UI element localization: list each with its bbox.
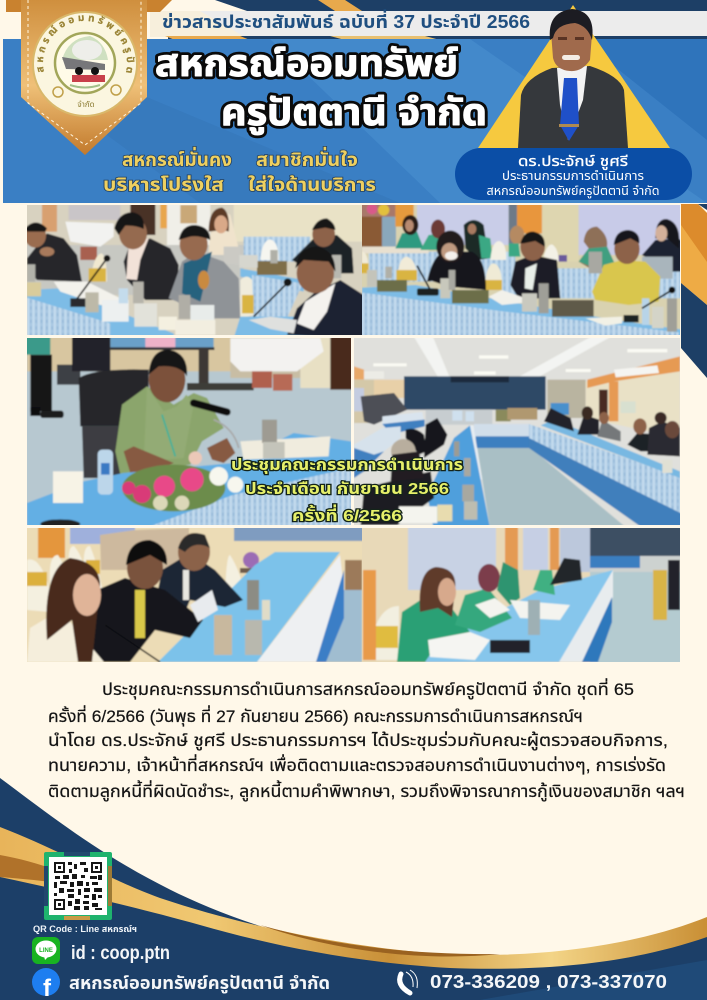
- edition line: ข่าวสารประชาสัมพันธ์ ฉบับที่ 37 ประจำปี 2566: [162, 9, 530, 32]
- slogan: สมาชิกมั่นใจ: [256, 147, 358, 171]
- body text: ติดตามลูกหนี้ที่ผิดนัดชำระ, ลูกหนี้ตามคำพิพากษา, รวมถึงพิจารณาการกู้เงินของสมาชิก ฯลฯ: [48, 780, 685, 801]
- icon: phone: [400, 970, 417, 993]
- title: ครูปัตตานี จำกัด: [221, 92, 487, 135]
- title: ครูปัตตานี จำกัด: [221, 92, 487, 135]
- photo caption: ครั้งที่ 6/2566: [292, 504, 402, 525]
- body text: [48, 678, 685, 801]
- photo: wide room: [354, 338, 680, 525]
- body text: ประชุมคณะกรรมการดำเนินการสหกรณ์ออมทรัพย์ครูปัตตานี จำกัด ชุดที่ 65: [102, 678, 634, 699]
- Facebook name: สหกรณ์ออมทรัพย์ครูปัตตานี จำกัด: [69, 973, 330, 994]
- portrait: [518, 9, 628, 148]
- slogan: ใส่ใจด้านบริการ: [248, 174, 376, 196]
- footer swoosh: [0, 778, 707, 1000]
- yellow triangle: [478, 5, 670, 148]
- photo caption: ประจำเดือน กันยายน 2566: [245, 481, 449, 498]
- side decoration: [681, 204, 707, 378]
- gold ribbon with seal: [6, 0, 172, 155]
- blue panel: [3, 39, 707, 203]
- slogan: สหกรณ์มั่นคง: [122, 147, 232, 171]
- QR code: [44, 852, 112, 920]
- name pill: ประธานกรรมการดำเนินการ: [502, 169, 644, 183]
- icon: LINE: [32, 937, 60, 964]
- body text: นำโดย ดร.ประจักษ์ ชูศรี ประธานกรรมการฯ ได้ประชุมร่วมกับคณะผู้ตรวจสอบกิจการ,: [48, 732, 668, 750]
- body text: ทนายความ, เจ้าหน้าที่สหกรณ์ฯ เพื่อติดตามและตรวจสอบการดำเนินงานต่างๆ, การเร่งรัด: [48, 754, 666, 775]
- photo caption: ประชุมคณะกรรมการดำเนินการ: [231, 457, 463, 474]
- title: [155, 43, 487, 135]
- gold ribbon with seal: จำกัด: [77, 100, 95, 109]
- photo: chairman: [27, 338, 351, 525]
- QR label: QR Code : Line สหกรณ์ฯ: [33, 924, 137, 934]
- icon: LINE: LINE: [39, 948, 53, 954]
- icon: Facebook: [32, 968, 60, 1000]
- top strip: [150, 0, 707, 40]
- photo: women at table: [362, 528, 680, 662]
- body text: ครั้งที่ 6/2566 (วันพุธ ที่ 27 กันยายน 2566) คณะกรรมการดำเนินการสหกรณ์ฯ: [48, 705, 583, 726]
- name pill: สหกรณ์ออมทรัพย์ครูปัตตานี จำกัด: [486, 184, 660, 198]
- photo: three attendees: [27, 528, 362, 662]
- slogan: [103, 147, 376, 196]
- slogan: บริหารโปร่งใส: [103, 174, 224, 196]
- title: สหกรณ์ออมทรัพย์: [155, 43, 458, 84]
- photo: meeting table right: [362, 205, 680, 335]
- LINE id: id : coop.ptn: [71, 943, 170, 964]
- header banner: [3, 0, 707, 203]
- photo: meeting table left: [27, 205, 362, 335]
- name pill: [455, 148, 692, 200]
- phone numbers: 073-336209 , 073-337070: [430, 972, 667, 992]
- photo collage: [20, 198, 692, 670]
- name pill: ดร.ประจักษ์ ชูศรี: [518, 153, 628, 170]
- title: สหกรณ์ออมทรัพย์: [155, 43, 458, 84]
- photo caption: [231, 457, 463, 525]
